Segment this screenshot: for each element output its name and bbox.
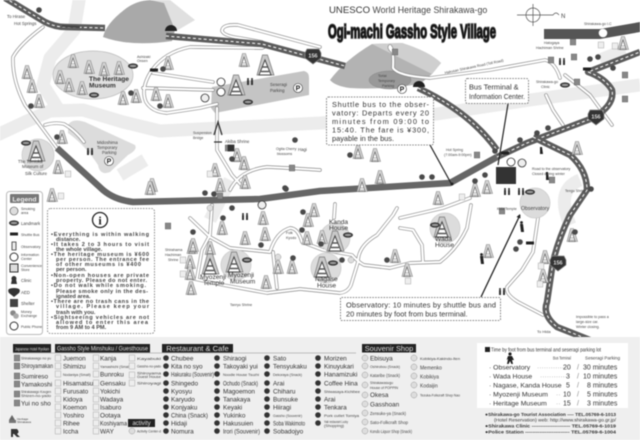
list: restaurants column 3: Chiharu [273,388,296,396]
list: restaurants column 4 [315,355,360,428]
list: hotels: Shirakawago Kougen [21,390,51,394]
legend labels: AED [21,290,30,295]
list: guesthouses: Hisamatsu [63,380,94,388]
list: restaurants column 2 [214,355,260,436]
activity: Activity Center-d [137,430,161,434]
legend labels: Smoking [21,207,35,211]
callout: shuttle bus: vatory: Departs every 20 [332,108,429,118]
info text: the whole village. [56,247,103,253]
map labels: Closed during winter [532,172,566,176]
info text: •Do not walk while smoking. [51,283,146,289]
map labels: Museum [230,278,256,286]
map labels: Myozenji [200,274,227,281]
map labels: The Heritage [89,76,129,83]
walking time table: Time by foot from bus terminal and seseragi parking lot [491,348,601,354]
map labels: Ashizaki [137,55,151,59]
map labels: Observatory [521,206,550,212]
info text: village. Please keep your [56,304,150,310]
list: restaurants column 3: Sobadojyo [273,428,304,436]
map labels: To Hida [537,329,551,334]
walking time table: 5 minutes [587,392,618,398]
landmark circles [22,139,550,283]
info text: per person. The entrance fee [56,257,149,263]
list: restaurants column 3: Tensyukaku [273,364,307,370]
list: restaurants column 3: Arai [273,380,284,388]
legend icons [8,207,20,330]
callout: shuttle bus: minutes from 09:00 to [332,117,429,126]
list: hotels: Shirakawago no yu [21,356,51,360]
walking time table: ············ [540,374,567,380]
list: restaurants column 2: Yukinko [223,412,246,420]
map labels: Midoshima [97,140,118,145]
map labels: House [329,225,348,232]
list: guesthouses column 2: Wadaya [100,396,124,404]
list: restaurants column 2: Tanakaya [223,396,251,404]
info text: of other museums is ¥400 [56,262,141,268]
map labels: Ogita Cherry [276,147,297,151]
info text [51,232,150,331]
list: restaurants column 3: Soba Wakimoto [273,420,305,428]
mountain east [330,43,441,88]
info panel [48,208,154,334]
list: souvenir shops [362,355,412,434]
section headers: Souvenir Shop [365,344,413,353]
compass: N [561,14,565,20]
list: souvenir shops column 2: Kobikiya-Kakindo-Iten [420,357,460,361]
list: restaurants column 2: Noodle House Tsuzhi [223,373,259,377]
list: restaurants column 2: Ochudo (Snack) [223,380,258,388]
list: souvenir shops column 2: Tezuka-Folkcraft Shop Nao [420,394,460,398]
list: guesthouses: Juemon [63,356,86,362]
list: guesthouses: Koemon [63,404,87,412]
walking time table: · Wada House [489,374,532,380]
map labels: Myozenji [228,272,255,279]
map labels: Hot Springs [14,21,36,26]
list: restaurants column 4: Pork cutlet Tomiya [324,414,359,418]
list: guesthouses column 2: WAY [100,428,115,436]
list: souvenir shops: Okesa [370,392,389,399]
map labels: Onsen [137,59,148,63]
map labels: blossoms [277,152,292,156]
list: guesthouses: Rihee [63,420,80,428]
info text: Please smoke only in the des- [56,289,148,295]
legend [6,192,42,334]
shirakawa-go interchange [544,22,640,39]
map labels: Hatogaya [544,41,559,45]
list: restaurants: Nomura [171,428,194,436]
list: restaurants [163,355,214,436]
parking signs: P [400,87,405,94]
legend labels: Center [21,257,33,261]
info text: •Everything is within walking [51,232,150,238]
list: guesthouses column 2: Bunroku [100,372,124,378]
map labels: Wada [435,236,452,243]
legend labels: Shuttle Bus [21,233,40,237]
walking time table: / [577,364,579,372]
map labels: Road to the observatory [532,167,571,171]
list: restaurants column 3: Hiiragi [273,404,291,412]
list: guesthouses column 3 [129,355,161,386]
list: restaurants column 4: Hanamizuki [324,372,357,378]
list: guesthouses column 2: Gensaku [100,380,126,388]
list: souvenir shops: Sato-Folkcraft Shop [370,420,409,425]
list: guesthouses column 2: Isaburo [100,404,122,412]
walking time table: ·· [556,400,561,408]
list: restaurants column 4: Morizen [324,356,347,362]
parking signs: P [296,86,301,93]
map labels: Hot Spring [446,148,463,152]
list: guesthouses: Yoshiro [63,412,85,420]
list: guesthouses column 2 [93,355,131,436]
walking time table: 10 [563,392,571,398]
bus terminal marker [496,167,516,184]
walking figures [480,147,549,264]
list: restaurants: Karyudo [171,396,195,404]
legend labels: Convenience [21,264,42,268]
parking signs: P [107,159,112,166]
map labels: Parking [270,88,285,93]
river [0,0,640,225]
list: souvenir shops: Oshirobou (Snack) [370,365,400,369]
callout: bus terminal: Information Center. [469,92,525,101]
map labels: Kyodo [286,236,296,240]
contact information: ●Shirakawa Clinic ---------------------- TEL.05769-6-1019 [485,424,616,428]
list: souvenir shops: Kondo Liquor Shop (Snack) [370,429,412,434]
bottom panel [0,337,640,440]
map labels: To Hirase [7,14,26,19]
map labels: The Tomioka [18,159,43,164]
contact information: ●Police Station ------------------------- TEL.05769-6-1004 [485,430,617,434]
legend labels: area [21,211,28,215]
list: restaurants: China (Snack) [171,412,208,420]
map labels: Parking [382,84,394,88]
map labels: Hachiman Shrine [536,46,564,50]
parking: toriai [369,71,411,89]
list: restaurants: Kyosyu [171,388,192,396]
list: restaurants column 2: Takoyaki yui [223,364,258,370]
walking time table: 3 [566,374,570,380]
walking time table: ·· [556,392,561,398]
walking time table: 5 [566,382,570,390]
list: guesthouses column 2: Yokichi [100,388,120,396]
legend labels: Money [21,310,32,314]
list: hotels: Sumireso [21,374,48,380]
walking time table: · Myozenji Museum [489,392,548,398]
map labels: Nagase [315,276,338,283]
list: restaurants column 2: Keyaki [223,404,242,412]
list: hotels: Yui no sho [21,400,51,408]
list: restaurants column 2: Irori (Souvenir) [223,428,260,436]
walking time table: · Heritage Museum [489,400,547,408]
walking time table: Bus Terminal [553,356,571,360]
map labels: Toriai [378,74,387,78]
info text: property. Please do not enter. [56,278,147,284]
list: restaurants column 3: Dekoraya (Snack) [273,373,302,377]
list: souvenir shops column 2: Kobikiya [420,374,439,380]
map labels: Clinic [541,85,550,89]
parking signs [104,84,406,166]
list: souvenir shops: Zensuke-ya (Snack) [370,411,407,416]
legend labels: Exchange [21,314,37,318]
highway 156 [5,0,640,340]
map labels: Tanryu Shrine [230,303,252,307]
list: restaurants: Kita no syo [171,364,203,370]
list: souvenir shops: Kataribe (Snack) [370,373,401,378]
map labels: Suspension [193,131,212,135]
list: hotels [14,355,53,408]
list: restaurants: Hakuraku (Souvenir) [171,372,214,378]
list: restaurants: Konjyaku [171,404,198,412]
list: guesthouses: Nodaniya (Small) [63,373,91,377]
callout: observatory: 20 minutes by foot from bus terminal. [346,310,468,318]
list: souvenir shops: House of POPPIN [370,386,398,390]
callout: bus terminal: Bus Terminal & [469,82,519,92]
facility icons [201,78,526,209]
list: souvenir shops column 2: Memenko [420,366,442,372]
list: restaurants column 4: Yaki restaurant Lucky [324,420,348,424]
list: restaurants column 3: Sato [273,356,287,362]
map labels: Bridge [193,136,203,140]
info text: •There are no trash cans in the [51,299,149,305]
contact information: ●Shirakawa-go Tourist Association ---- TEL.05769-6-1013 [485,412,616,417]
legend labels [21,207,42,329]
map labels: Shirakawa-go I.C [584,22,612,26]
callout: shuttle bus: Shuttle bus to the obser- [332,100,430,109]
callout: bus terminal [466,78,528,165]
legend labels: Store [21,268,30,272]
map labels: Temple [203,280,225,287]
info text: •Non-open houses are private [51,273,149,279]
main road [57,148,497,202]
info text: •Sightseeing vehicles are not [51,315,149,321]
list: hotels: Yamakoshi [21,382,52,388]
walking time table: · [560,382,562,390]
list: hotels: Shiroyamakan [21,363,53,370]
walking time table: 8 minutes [587,382,618,390]
map labels: Kanda [329,219,348,226]
logos: Shirakawa [17,420,31,424]
legend labels: Observatory [21,245,41,249]
map labels: Shirahama [165,248,182,252]
list: souvenir shops: Shirakawasugu [370,381,393,385]
walking time table: 10 minutes [583,374,618,380]
list: guesthouses: Shimizu [63,364,86,370]
map labels: House [317,282,336,290]
list: restaurants column 3 [264,355,307,436]
list: guesthouses: Iccha [63,428,79,436]
map labels: Shrine [168,258,178,262]
logos: Heritage [17,417,29,421]
map labels: Akiba Shrine [225,139,250,144]
walking time table: ··············· [537,364,571,372]
suspension bridge [214,122,222,142]
walking time table: · Observatory [489,364,531,372]
legend labels: Clinic [21,278,32,283]
activity [128,419,161,434]
list: souvenir shops column 2: Kodaijin [420,384,438,390]
contact information [485,412,617,434]
map labels: Tengu Shrine [565,189,586,193]
list: restaurants: Hidaji [171,420,187,428]
legend labels: Landmark [21,221,41,226]
info text: •The heritage museum is ¥600 [51,252,149,258]
map labels: Silk Culture [25,171,48,176]
map labels: Hagi [298,147,307,152]
map labels: Parking [102,150,117,155]
info text: per person. [56,267,87,273]
list: restaurants column 2: Shiraogi [223,356,246,362]
walking time table [477,343,628,408]
info text: from 9 AM to 4 PM. [56,325,107,331]
walking time table: / [577,392,579,398]
list: restaurants: Chubee [171,356,194,362]
map labels: Impossible to pass a [576,315,609,319]
section headers: Gassho Style Minshuku / Guesthouse [57,346,148,353]
callout: observatory: Observatory: 10 minutes by shuttle bus and [346,300,496,310]
white roads [13,25,612,315]
walking time table: 20 [563,364,571,372]
section headers [13,344,416,353]
list: guesthouses column 2: Yamashichi (Small) [100,365,131,369]
list: souvenir shops: Ebisuya [370,356,393,362]
map labels [7,14,612,334]
list: restaurants column 2: Magoemon [223,388,255,396]
walking time table: 3 minutes [587,400,618,408]
map labels: Temporary [378,79,395,83]
map labels: large-size car. [576,320,598,324]
list: restaurants column 4: Kinuyukari [324,364,354,370]
list: restaurants column 4: Shiwasaya-Kichibee [324,390,360,394]
map labels: Hachiman [165,253,181,257]
callout: shuttle bus: 15:40. The fare is ¥300, [332,126,429,134]
parking: seseragi [211,71,309,113]
mountain west [103,0,195,43]
list: guesthouses column 3: Guest House [137,375,161,379]
activity: activity [132,421,151,427]
list: guesthouses column 2: Kanja [100,356,117,362]
list: souvenir shops: Gasshoan [370,402,400,408]
parking: midoshima [68,121,136,173]
list: guesthouses: Furusato [63,388,89,396]
info text: allowed to enter this area [56,320,149,326]
list: hotels: Shizen-no-yado [21,394,51,398]
map labels: Seseragi [270,82,287,87]
legend labels: Public Phone [21,325,42,329]
walking time table: / [577,400,579,408]
map labels: Kida Temple [497,207,517,211]
legend: Legend [12,196,37,203]
map labels: Museum of [22,164,44,169]
title: main: Ogi-machi Gassho Style Village [328,22,496,43]
list: restaurants column 2: Hakusuien [223,420,254,428]
shields 156 [305,49,604,271]
walking time table: 15 [563,400,571,408]
list: guesthouses: Kidoya [63,396,83,404]
list: restaurants: Shingedo [171,380,198,388]
list: guesthouses column 3: Gassho-no-yado [137,364,161,368]
contact information: (Hotel Reservation) web: http://www.shirakawa-go.gr.jp/ [494,418,617,422]
callout: shuttle bus: payable in the bus. [332,134,394,143]
walking time table: / [577,374,579,380]
map labels: Temporary [97,145,118,150]
map labels: House [435,242,454,249]
walking time table: · Nagase, Kanda House [489,382,562,390]
info text: •It takes 2 to 3 hours to visit [51,242,149,248]
title: unesco line: UNESCO World Heritage Shirakawa-go [329,5,487,16]
info text: distance. [56,237,81,243]
map labels: (7:00am-9:00pm) [444,153,472,157]
walking time table: / [577,382,579,390]
list: guesthouses column 2: Ootaya [100,412,121,420]
map labels: Folk [286,231,293,235]
list: guesthouses column 2: Koshiyama [100,420,127,428]
list: souvenir shops column 2 [411,355,460,398]
legend labels: Information [21,253,39,257]
section headers: Japanese Hotel Ryokan [15,346,49,352]
list: restaurants column 3: Bunsuke [273,396,298,404]
map labels: Museum [89,82,116,90]
section headers: Restaurant & Cafe [166,344,229,353]
tunnels [62,25,425,87]
callout: shuttle bus [326,97,454,186]
map labels: Shirakawa-go [536,80,558,84]
list: guesthouses column 3: Kayabuki [137,357,161,361]
logos [9,415,31,437]
parking: heritage museum area [53,51,133,99]
gassho houses [22,36,628,294]
list: restaurants column 4: Arai [324,396,335,404]
callout: observatory [340,214,520,320]
legend labels: Shelter [21,301,35,306]
info text: trash with you. [56,310,96,316]
icon: walker [507,352,514,364]
list: guesthouses [55,355,161,436]
list: restaurants column 4: Coffee Hina [324,380,358,388]
icon: information: i [98,214,102,228]
list: restaurants column 3: Gassho (Souvenir) [273,414,302,418]
list: restaurants column 4: (Shopping) [324,424,344,428]
walking time table: 30 minutes [583,364,618,372]
compass [517,4,565,26]
list: guesthouses column 3: Shiroyama [137,372,161,376]
list: guesthouses column 3: Shiroyagi [137,382,161,386]
walking time table: Seseragi Parking [585,356,621,360]
map labels: Hakusan Shirakawa Road (Toll Road) [444,59,504,75]
map labels: Winter closing. [576,325,600,329]
list: restaurants column 4: Tenkara [324,404,347,412]
restaurant and shop markers [21,7,628,295]
info text: ignated area. [56,294,91,300]
